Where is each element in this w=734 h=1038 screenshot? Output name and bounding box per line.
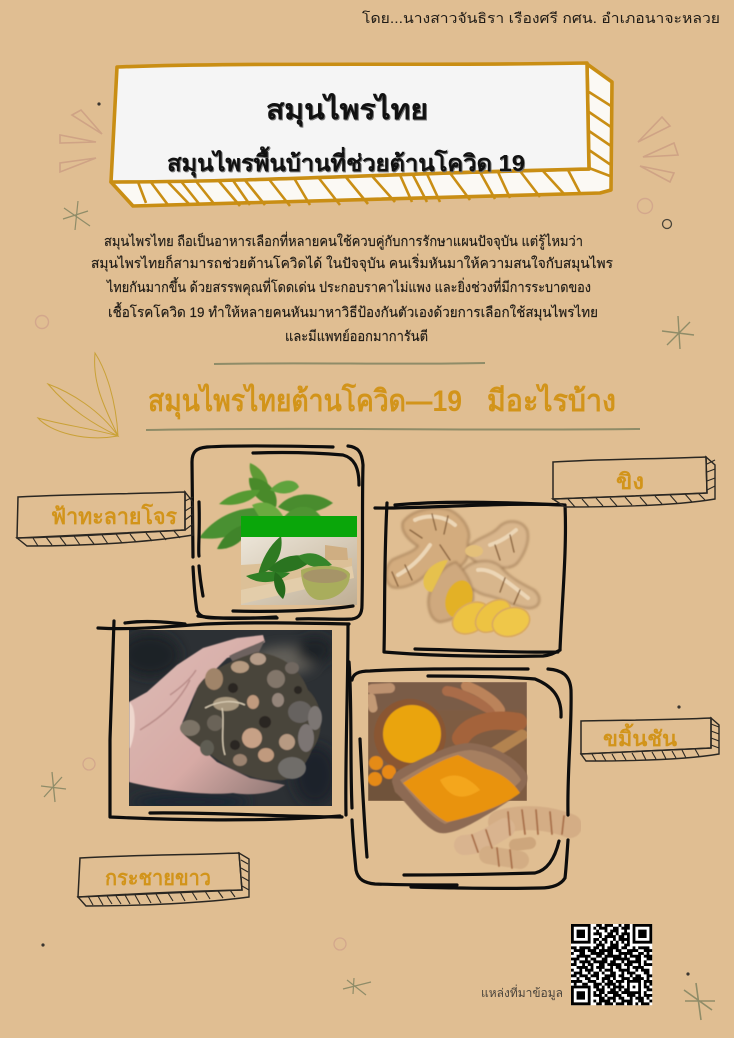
label text: กระชายขาว <box>105 867 211 890</box>
ginger front root <box>463 561 539 608</box>
banner heading: สมุนไพรไทย <box>266 93 428 127</box>
label: turmeric <box>581 718 719 761</box>
label text: ขมิ้นชัน <box>603 723 678 751</box>
section heading: สมุนไพรไทยต้านโควิด—19 <box>148 382 462 420</box>
ginger slices <box>447 596 495 640</box>
ginger back root <box>468 521 528 568</box>
label text: ขิง <box>616 469 644 494</box>
intro paragraph <box>91 232 613 344</box>
section heading: มีอะไรบ้าง <box>487 383 616 418</box>
banner subheading shadow: สมุนไพรพื้นบ้านที่ช่วยต้านโควิด 19 <box>168 147 526 179</box>
circle left <box>36 316 48 328</box>
label: fa talai jone <box>17 492 193 546</box>
frame: ginger <box>375 502 565 656</box>
banner heading shadow: สมุนไพรไทย <box>267 94 429 128</box>
section heading <box>148 382 616 420</box>
intro paragraph: ไทยกันมากขึ้น ด้วยสรรพคุณที่โดดเด่น ประกอบราคาไม่แพง และยิ่งช่วงที่มีการระบาดของ <box>106 277 591 296</box>
photo: ginger <box>386 508 539 641</box>
ginger main root <box>386 508 469 588</box>
wooden bowl <box>392 743 527 833</box>
star bottom <box>343 978 371 995</box>
ginger cut piece <box>428 562 473 622</box>
circle bottom <box>334 938 346 950</box>
ginger highlights <box>398 517 528 598</box>
tray photo <box>241 536 357 605</box>
intro paragraph: สมุนไพรไทย ถือเป็นอาหารเลือกที่หลายคนใช้ควบคู่กับการรักษาแผนปัจจุบัน แต่รู้ไหมว่า <box>104 232 583 250</box>
star bottom right <box>684 983 715 1020</box>
fresh turmeric roots <box>464 810 570 868</box>
ginger wrinkles <box>392 514 520 604</box>
banner front <box>111 63 589 182</box>
banner side faces <box>111 64 612 206</box>
label text: ฟ้าทะลายโจร <box>51 503 177 529</box>
intro paragraph: สมุนไพรไทยก็สามารถช่วยต้านโควิดได้ ในปัจจุบัน คนเริ่มหันมาให้ความสนใจกับสมุนไพร <box>91 254 613 272</box>
label: ginger <box>553 457 715 507</box>
root clump <box>180 652 321 780</box>
intro paragraph: และมีแพทย์ออกมาการันตี <box>285 328 428 344</box>
banner stripes <box>138 92 611 206</box>
star top left <box>63 201 90 230</box>
photo: turmeric <box>368 682 570 868</box>
ginger yellow flesh <box>423 560 448 592</box>
author line: โดย...นางสาวจันธิรา เรืองศรี กศน. อำเภอนาจะหลวย <box>362 10 720 26</box>
green band <box>241 516 357 537</box>
divider bottom <box>146 429 640 430</box>
QR code <box>571 924 652 1005</box>
divider top <box>214 363 485 364</box>
left burst <box>60 110 102 172</box>
frame: krachai <box>98 616 349 820</box>
frame: turmeric <box>349 662 571 888</box>
photo: fa talai jone leaves <box>199 463 357 605</box>
frame: fa talai jone <box>192 446 363 619</box>
intro paragraph: เชื้อโรคโควิด 19 ทำให้หลายคนหันมาหาวิธีป้องกันตัวเองด้วยการเลือกใช้สมุนไพรไทย <box>108 302 598 321</box>
turmeric powder <box>403 755 520 822</box>
photo: krachai root in hand <box>120 630 337 812</box>
title banner <box>111 63 612 206</box>
leaf sketch <box>38 353 118 438</box>
label: krachai <box>78 853 249 906</box>
right burst <box>638 117 678 182</box>
circle left lower <box>83 758 95 770</box>
circle right pink <box>638 198 652 214</box>
circle right dark <box>662 220 672 228</box>
source label: แหล่งที่มาข้อมูล <box>481 984 563 1001</box>
banner subheading: สมุนไพรพื้นบ้านที่ช่วยต้านโควิด 19 <box>167 146 525 178</box>
star right <box>662 316 694 349</box>
star left lower <box>41 772 66 802</box>
dots <box>41 102 690 976</box>
